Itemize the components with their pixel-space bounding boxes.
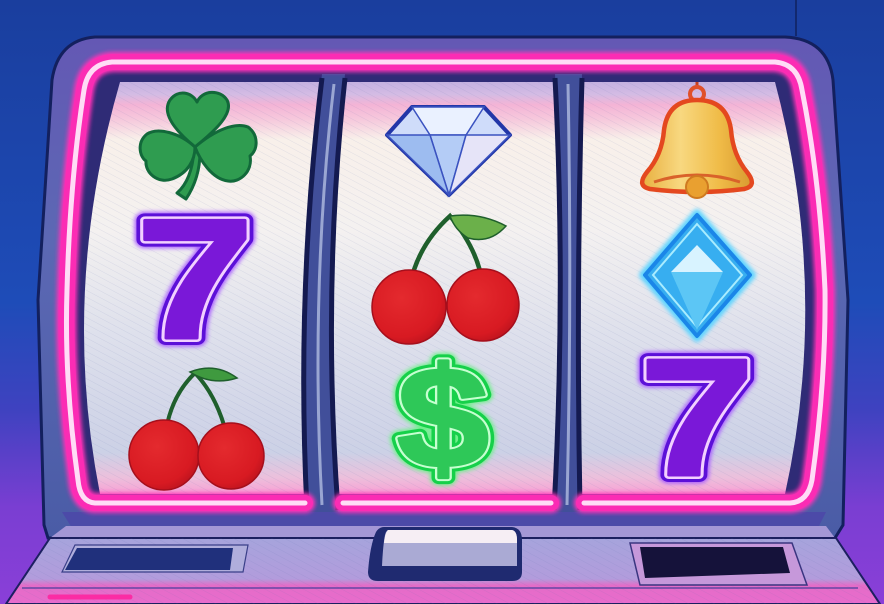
icon: blue gem xyxy=(643,213,752,338)
icon: neon dollar sign: $ xyxy=(397,339,489,498)
number: seven, right reel: 7 xyxy=(640,325,754,511)
number: seven, right reel: 7 xyxy=(640,325,754,511)
right coin slot xyxy=(630,543,807,585)
icon: cherries, middle reel xyxy=(372,215,519,344)
icon: shamrock xyxy=(140,92,256,199)
number: seven, right reel: 7 xyxy=(640,325,754,511)
reel 3 xyxy=(578,82,805,494)
control panel xyxy=(6,538,880,604)
icon: diamond, middle reel xyxy=(387,107,510,195)
icon: neon dollar sign: $ xyxy=(397,339,489,498)
neon pink frame xyxy=(66,62,825,503)
number: seven, left reel: 7 xyxy=(136,184,254,375)
cabinet lower trim xyxy=(50,512,835,538)
reel separators xyxy=(304,74,582,512)
icon: neon dollar sign: $ xyxy=(397,339,489,498)
center button xyxy=(368,527,522,581)
number: seven, left reel: 7 xyxy=(136,184,254,375)
icon: cherries, left reel xyxy=(129,368,264,490)
icon: neon dollar sign: $ xyxy=(397,339,489,498)
reel 2 xyxy=(331,82,560,494)
number: seven, right reel: 7 xyxy=(640,325,754,511)
number: seven, left reel: 7 xyxy=(136,184,254,375)
cabinet body xyxy=(38,37,848,538)
left coin slot xyxy=(62,545,248,572)
reel 1 xyxy=(84,82,322,494)
icon: golden bell xyxy=(642,82,752,198)
number: seven, left reel: 7 xyxy=(136,184,254,375)
